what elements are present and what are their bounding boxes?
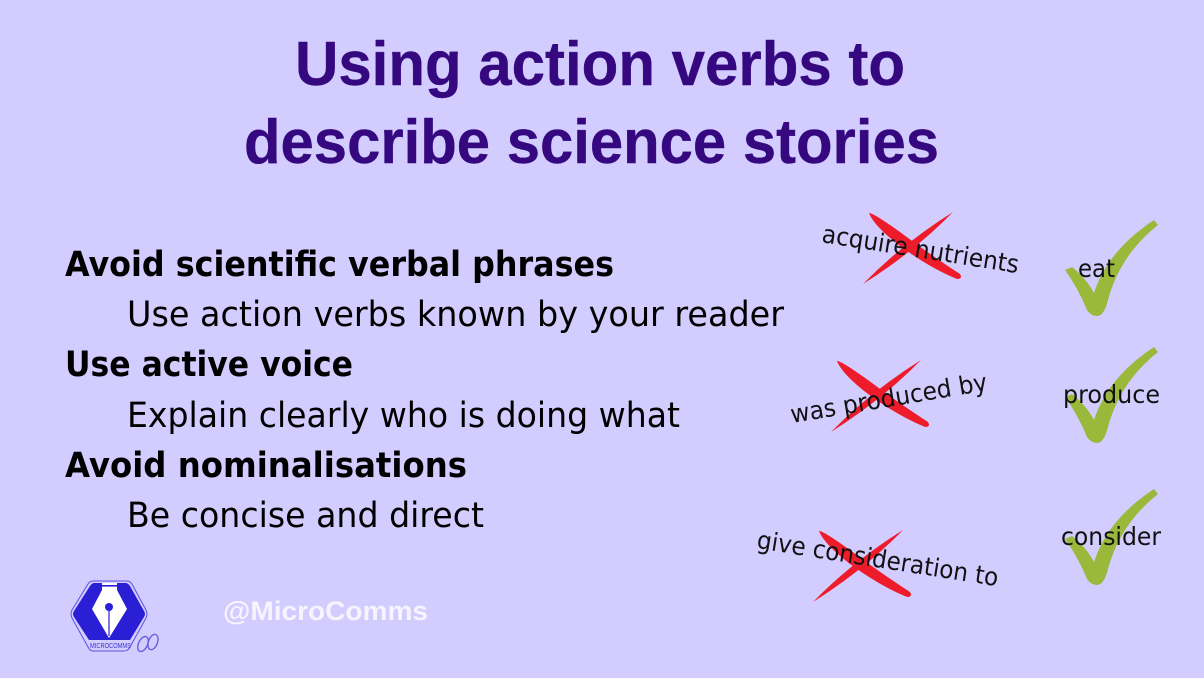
example 3: check mark with replacement verb: consider	[1061, 522, 1162, 551]
title: describe science stories	[244, 108, 939, 177]
logo: pen nib hexagon: MICROCOMMS	[90, 643, 131, 650]
example 2: check mark with replacement verb	[1063, 347, 1160, 443]
tip: be concise: Be concise and direct	[127, 496, 484, 536]
example 3: crossed-out phrase: give consideration to	[755, 525, 1001, 592]
social handle: @MicroComms	[223, 596, 428, 626]
heading: use active voice: Use active voice	[65, 345, 353, 385]
tip: explain clearly: Explain clearly who is doing what	[127, 396, 680, 436]
example 1: check mark with replacement verb: eat	[1078, 254, 1115, 283]
logo: pen nib hexagon	[71, 581, 160, 653]
example 1: check mark with replacement verb	[1065, 220, 1158, 316]
heading: avoid scientific verbal phrases: Avoid scientific verbal phrases	[65, 245, 614, 285]
example 2: crossed-out phrase: was produced by	[788, 367, 989, 429]
title	[244, 30, 939, 177]
guidance text block	[65, 245, 785, 536]
title: Using action verbs to	[295, 30, 905, 99]
tip: use action verbs: Use action verbs known by your reader	[127, 295, 785, 335]
heading: avoid nominalisations: Avoid nominalisations	[65, 446, 467, 486]
example 1: crossed-out phrase: acquire nutrients	[820, 219, 1021, 279]
example 3: check mark with replacement verb	[1061, 489, 1162, 585]
example 2: check mark with replacement verb: produce	[1063, 380, 1160, 409]
